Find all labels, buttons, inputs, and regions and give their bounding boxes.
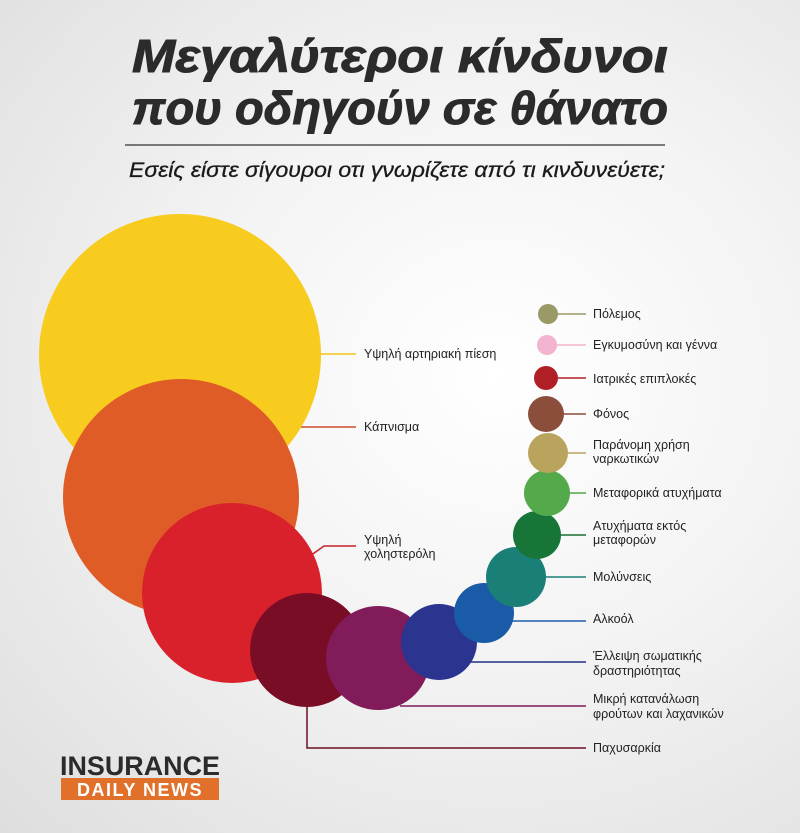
labels: Υψηλή [364, 533, 401, 547]
labels: Παράνομη χρήση [593, 438, 690, 452]
labels: Εγκυμοσύνη και γέννα [593, 338, 717, 352]
divider [125, 144, 665, 146]
labels: Ατυχήματα εκτός [593, 519, 686, 533]
labels: χοληστερόλη [364, 547, 435, 561]
logo [60, 751, 220, 800]
labels: Μεταφορικά ατυχήματα [593, 486, 722, 500]
labels: Υψηλή αρτηριακή πίεση [364, 347, 496, 361]
labels: Έλλειψη σωματικής [592, 649, 702, 663]
labels: Παχυσαρκία [593, 741, 661, 755]
title [132, 30, 668, 134]
title: Μεγαλύτεροι κίνδυνοι [132, 30, 668, 82]
labels: μεταφορών [593, 533, 656, 547]
labels: ναρκωτικών [593, 452, 659, 466]
labels: δραστηριότητας [593, 664, 680, 678]
labels [364, 307, 724, 755]
leader lines [282, 314, 586, 748]
title: που οδηγούν σε θάνατο [132, 82, 668, 134]
labels: Αλκοόλ [593, 612, 634, 626]
labels: Μολύνσεις [593, 570, 651, 584]
logo: DAILY NEWS [77, 780, 203, 800]
labels: Πόλεμος [593, 307, 641, 321]
labels: Ιατρικές επιπλοκές [593, 372, 696, 386]
labels: Κάπνισμα [364, 420, 419, 434]
bubble chart [39, 214, 570, 710]
labels: Μικρή κατανάλωση [593, 692, 699, 706]
logo: INSURANCE [60, 751, 220, 781]
labels: φρούτων και λαχανικών [593, 707, 724, 721]
labels: Φόνος [593, 407, 629, 421]
subtitle: Εσείς είστε σίγουροι οτι γνωρίζετε από τι κινδυνεύετε; [129, 159, 665, 182]
